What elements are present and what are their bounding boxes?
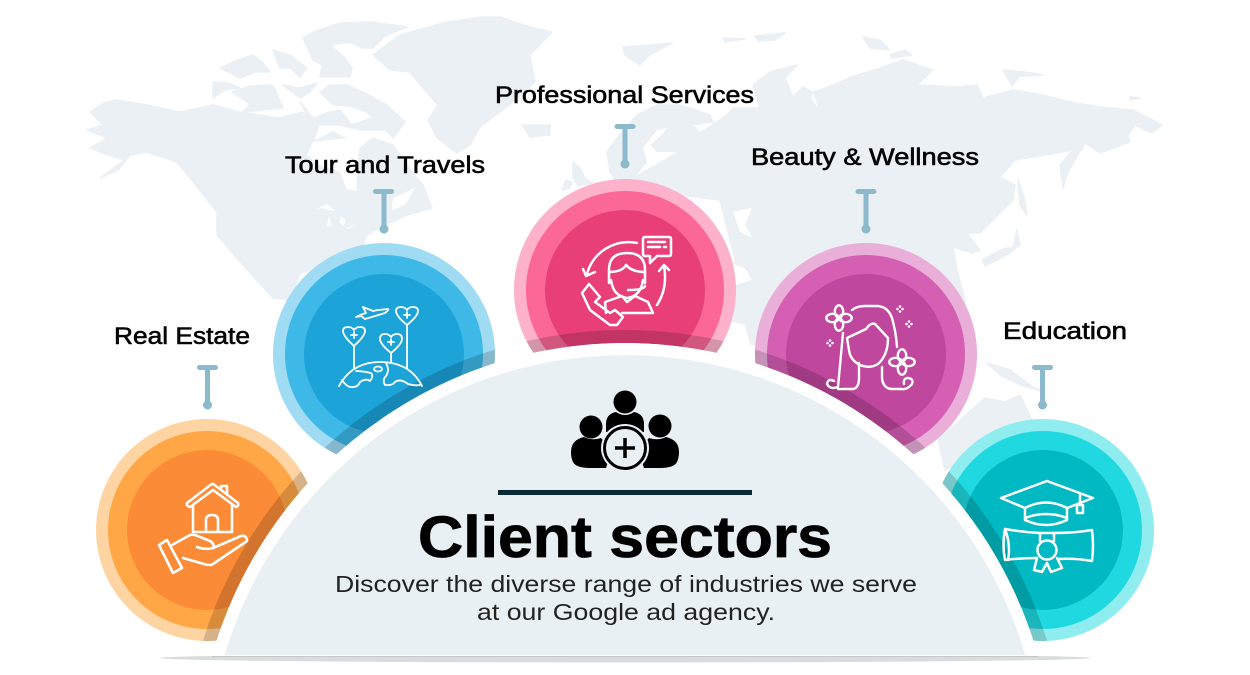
icon: support agent with phone <box>582 237 671 325</box>
subtitle: Discover the diverse range of industries we serve <box>335 571 917 597</box>
panel: central dome <box>212 343 1038 657</box>
divider <box>498 490 752 495</box>
label: professional services: Professional Services <box>495 82 754 109</box>
icon: globe with balloons and plane <box>339 307 422 387</box>
icon: woman with flowers <box>826 305 915 389</box>
circle: education <box>932 419 1154 641</box>
circle: tour and travels <box>273 243 495 465</box>
label: beauty and wellness: Beauty & Wellness <box>751 144 979 171</box>
icon: house in hand <box>159 484 247 573</box>
icon: sparkles <box>826 305 913 347</box>
label: education: Education <box>1003 318 1127 345</box>
base shadow <box>160 654 1090 662</box>
pin: beauty and wellness <box>856 189 876 234</box>
panel: sector circles <box>96 179 1154 641</box>
label: real estate: Real Estate <box>114 323 250 350</box>
label: tour and travels: Tour and Travels <box>285 152 485 179</box>
subtitle: at our Google ad agency. <box>477 599 775 625</box>
map water cut-outs <box>307 92 818 345</box>
pin: real estate <box>197 365 218 410</box>
pin: education <box>1032 365 1053 410</box>
circle: professional services <box>514 179 736 353</box>
icon: graduation cap and diploma <box>1001 481 1093 572</box>
pin: professional services <box>614 124 636 168</box>
icon: people with plus <box>571 390 679 472</box>
pin: tour and travels <box>373 189 394 234</box>
circle: real estate <box>96 419 318 641</box>
circle: beauty and wellness <box>755 243 977 465</box>
subtitle <box>335 571 917 625</box>
world map background <box>87 17 1162 470</box>
title: Client sectors <box>418 505 832 570</box>
